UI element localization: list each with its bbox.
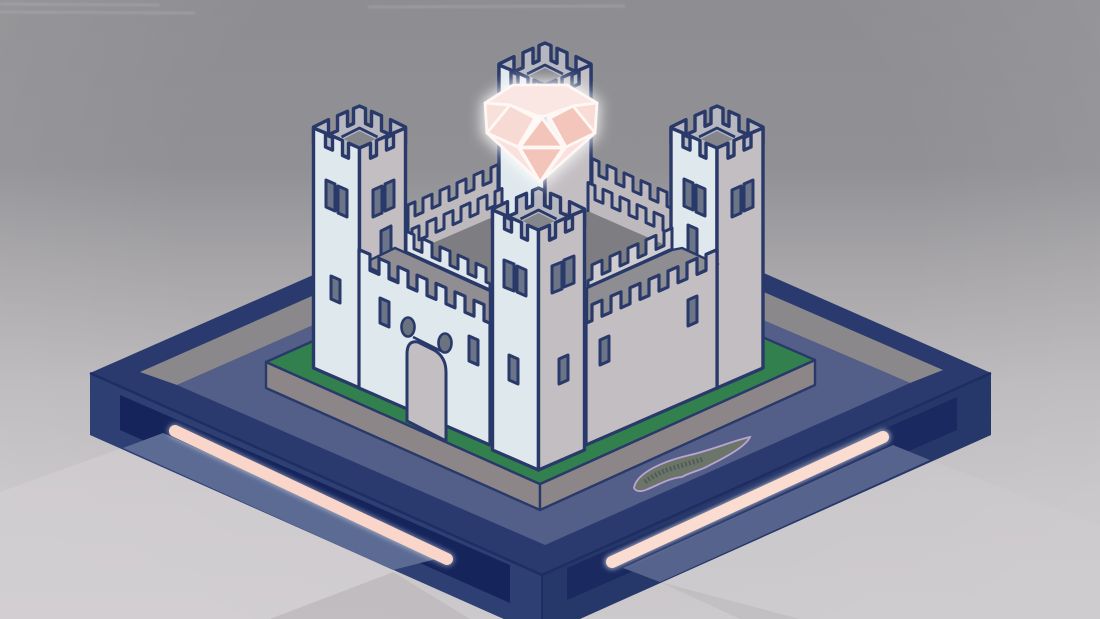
inner parapet right (588, 228, 672, 287)
front-left gate wall (359, 250, 490, 445)
gem lower left facet (487, 133, 540, 182)
front corner tower (492, 188, 584, 470)
grass (266, 240, 815, 484)
gem left side facet (485, 103, 510, 133)
back-right curtain wall (588, 158, 682, 266)
inner parapet left (406, 231, 490, 290)
platform right side (540, 360, 815, 510)
right light beam (623, 445, 930, 582)
gem crown (485, 85, 597, 116)
gem left kite facet (487, 105, 535, 147)
drawbridge chain wheels (402, 318, 452, 352)
front-right wall (586, 250, 717, 445)
icon: crocodile in moat (634, 437, 750, 491)
right recess (567, 397, 957, 600)
gem glow (482, 80, 600, 188)
plinth right face (542, 373, 991, 619)
plinth left face (90, 373, 542, 619)
courtyard (412, 212, 672, 312)
right corner tower (671, 106, 763, 388)
left light beam (123, 433, 440, 570)
island platform (266, 240, 815, 510)
back tower (499, 43, 591, 325)
plinth top rim (90, 175, 991, 575)
left recess (120, 395, 510, 603)
moat water (177, 225, 910, 545)
right light tube (612, 437, 883, 562)
gem lower right facet (540, 133, 595, 182)
gem right kite facet (550, 106, 595, 147)
gem tip facet (520, 148, 563, 182)
walkway left (362, 248, 490, 325)
left light tube (175, 431, 447, 559)
plinth base (90, 175, 991, 619)
gem centre facet (520, 118, 563, 147)
icon: glowing ruby gem (482, 80, 600, 188)
moat inner walls (140, 195, 943, 385)
left corner tower (314, 106, 406, 388)
platform left side (266, 362, 540, 510)
walkway right (587, 248, 717, 330)
back-left curtain wall (408, 164, 502, 272)
gate door (407, 342, 446, 441)
gem right side facet (573, 103, 597, 133)
